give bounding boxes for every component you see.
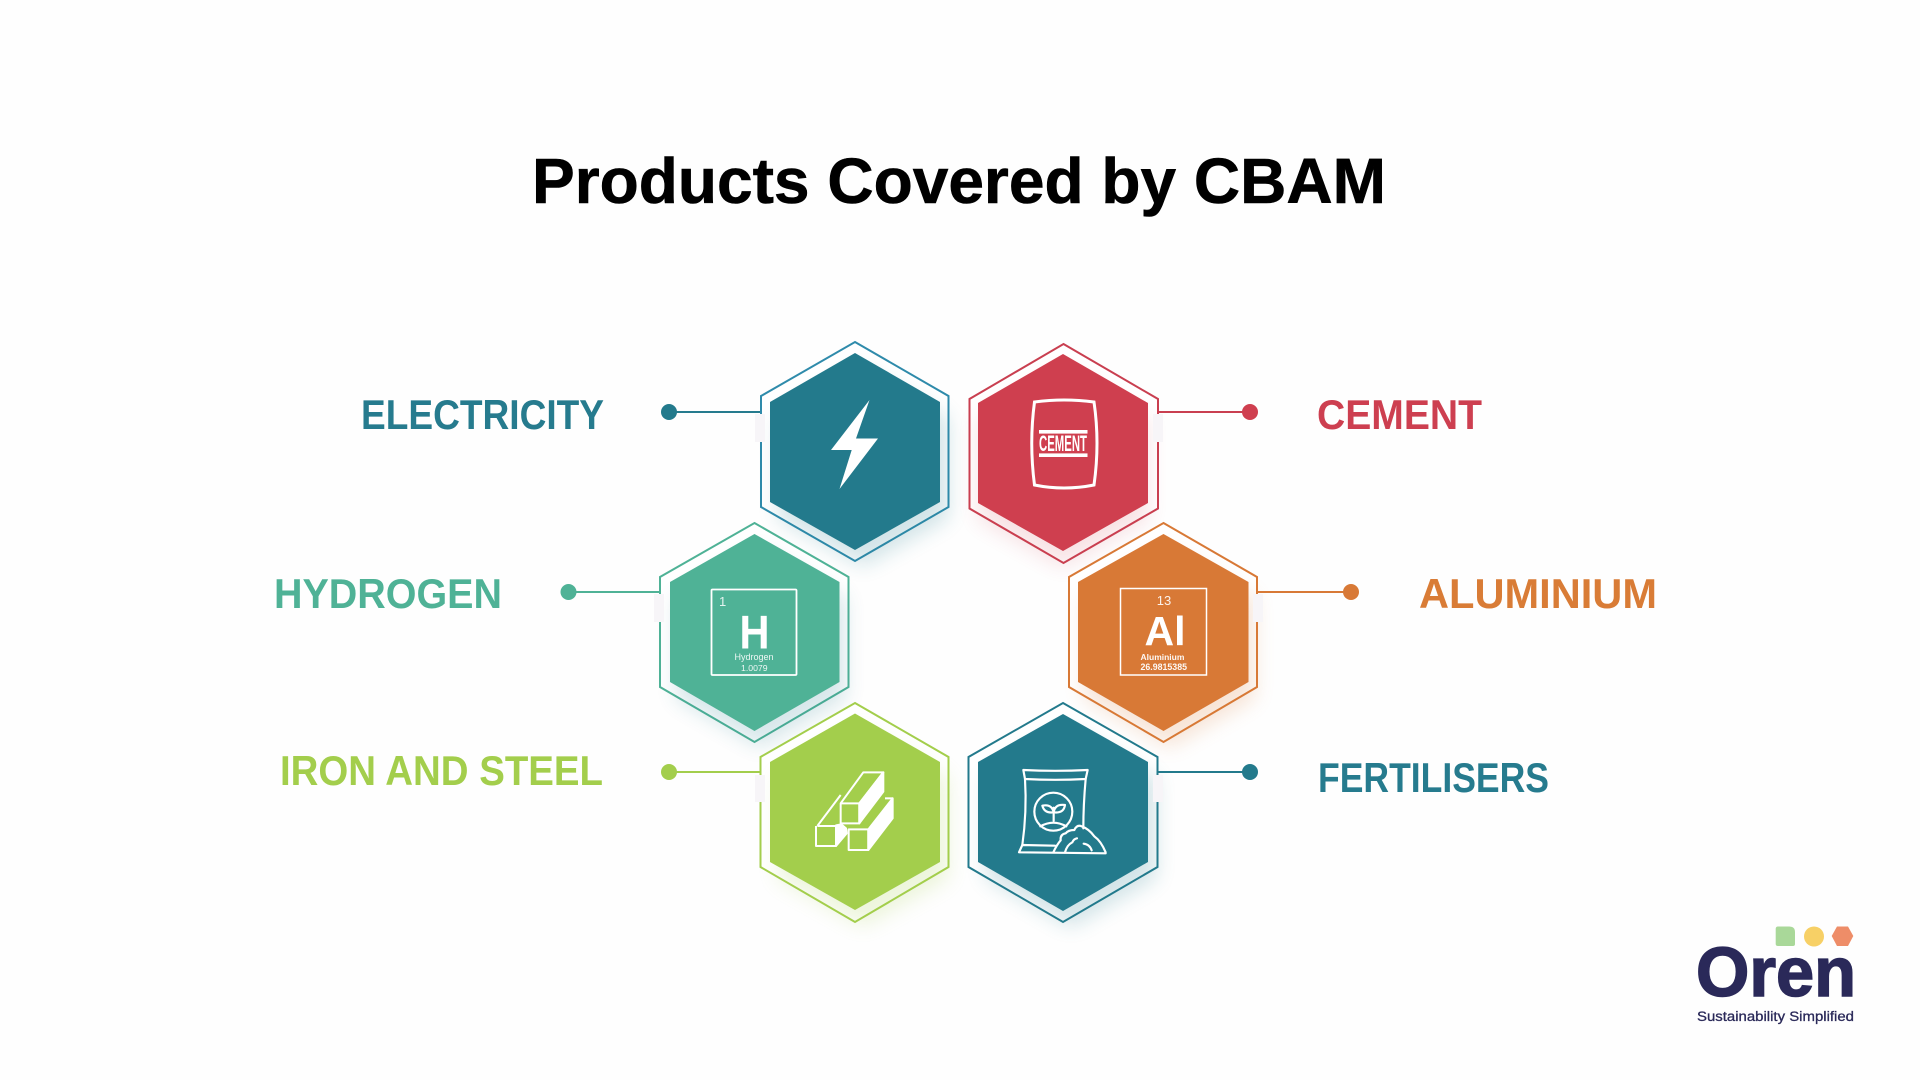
hexagon: electricity outline [761,342,948,561]
panel: hydrogen [274,523,848,747]
icon: hydrogen element tile: Hydrogen [734,652,774,662]
connector: hydrogen [560,584,660,600]
logo: Oren [1696,926,1856,1024]
icon: hydrogen element tile: H [740,606,770,658]
logo mark: orange hexagon [1832,926,1853,946]
connector: cement [1158,404,1258,420]
label: aluminium: ALUMINIUM [1419,570,1657,617]
icon: lightning bolt [831,400,878,489]
hexagon: hydrogen outline [660,523,848,742]
panel: electricity [361,342,948,566]
connector: aluminium [1257,584,1359,600]
connector: fertilisers [1157,764,1258,780]
icon: fertiliser bag [1019,770,1106,853]
icon: metal bars [816,772,893,850]
panel: fertilisers [968,703,1549,927]
hexagon: electricity fill [770,353,940,550]
hexagon: cement outline [970,344,1158,563]
icon: aluminium element tile: 13 [1157,593,1171,608]
panel: aluminium [1069,523,1657,747]
logo mark: green square [1776,926,1795,946]
label: iron and steel: IRON AND STEEL [280,747,603,794]
icon: aluminium element tile: Al [1144,608,1186,654]
logo mark: yellow circle [1804,926,1824,946]
hexagon: fertilisers fill [978,714,1148,911]
hexagon: iron and steel outline [760,703,948,922]
hexagon: aluminium outline [1069,523,1257,742]
logo wordmark: Oren [1696,933,1856,1011]
icon: hydrogen element tile: 1 [719,594,726,609]
connector: iron and steel [661,764,761,780]
icon: aluminium element tile: 26.9815385 [1140,662,1187,672]
icon: hydrogen element tile: 1.0079 [741,663,768,673]
icon: hydrogen element tile [712,590,796,675]
hexagon: aluminium fill [1078,534,1248,731]
label: hydrogen: HYDROGEN [274,570,502,617]
icon: aluminium element tile [1120,588,1206,675]
logo tagline: Sustainability Simplified [1697,1009,1854,1024]
panel: cement [970,344,1482,567]
hexagon: iron and steel fill [770,714,940,910]
hexagon: fertilisers outline [968,703,1158,922]
title: Products Covered by CBAM [532,145,1386,217]
label: fertilisers: FERTILISERS [1318,754,1549,801]
icon: cement bag: CEMENT [1039,431,1087,456]
icon: cement bag [1032,400,1097,488]
hexagon: hydrogen fill [670,534,840,731]
panel: iron and steel [280,703,948,926]
label: electricity: ELECTRICITY [361,391,604,438]
hexagon: cement fill [978,354,1148,551]
connector: electricity [661,404,761,420]
label: cement: CEMENT [1317,391,1482,438]
icon: aluminium element tile: Aluminium [1140,652,1185,662]
